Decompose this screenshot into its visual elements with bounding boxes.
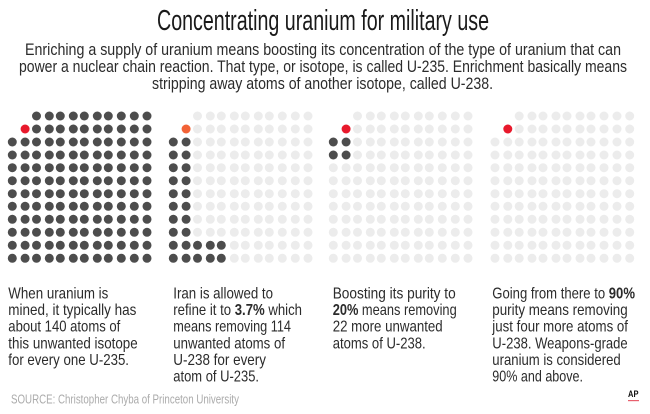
text: 90 percent <box>491 285 635 386</box>
dot grid: 20 percent <box>329 112 472 263</box>
text: 3.7 percent: atom of U-235. <box>173 369 259 386</box>
text: 3.7 percent: Iran is allowed to <box>173 285 273 302</box>
text: 90 percent: uranium is considered <box>492 352 621 369</box>
title: Concentrating uranium for military use <box>157 5 489 37</box>
text: 3.7 percent: unwanted atoms of <box>173 335 285 352</box>
text: 90 percent: purity means removing <box>492 302 628 319</box>
text: mined uranium: mined, it typically has <box>8 302 136 319</box>
text: 20 percent: 20% means removing <box>333 302 457 319</box>
text: 20 percent: atoms of U-238. <box>333 335 426 352</box>
source: SOURCE: Christopher Chyba of Princeton University <box>11 392 240 406</box>
text: 3.7 percent: U-238 for every <box>173 352 266 369</box>
dot grid: mined uranium <box>8 112 151 263</box>
text: 90 percent: Going from there to 90% <box>492 285 635 302</box>
text: mined uranium: When uranium is <box>8 285 108 302</box>
text: 3.7 percent <box>173 285 302 386</box>
intro text: stripping away atoms of another isotope, called U-238. <box>152 74 493 93</box>
text: 20 percent: 22 more unwanted <box>333 319 443 336</box>
dot grid: 3.7 percent <box>169 112 312 263</box>
text: 20 percent: Boosting its purity to <box>333 285 456 302</box>
text: 3.7 percent: refine it to 3.7% which <box>173 302 302 319</box>
AP logo: AP <box>628 389 638 399</box>
text: mined uranium: about 140 atoms of <box>8 319 121 336</box>
text: 90 percent: 90% and above. <box>492 369 583 386</box>
text: mined uranium <box>8 285 138 369</box>
intro text <box>19 40 627 93</box>
dot grid: 90 percent <box>490 112 634 263</box>
text: 3.7 percent: means removing 114 <box>173 319 291 336</box>
text: mined uranium: this unwanted isotope <box>8 335 138 352</box>
text: 20 percent <box>333 285 457 352</box>
text: mined uranium: for every one U-235. <box>8 352 129 369</box>
